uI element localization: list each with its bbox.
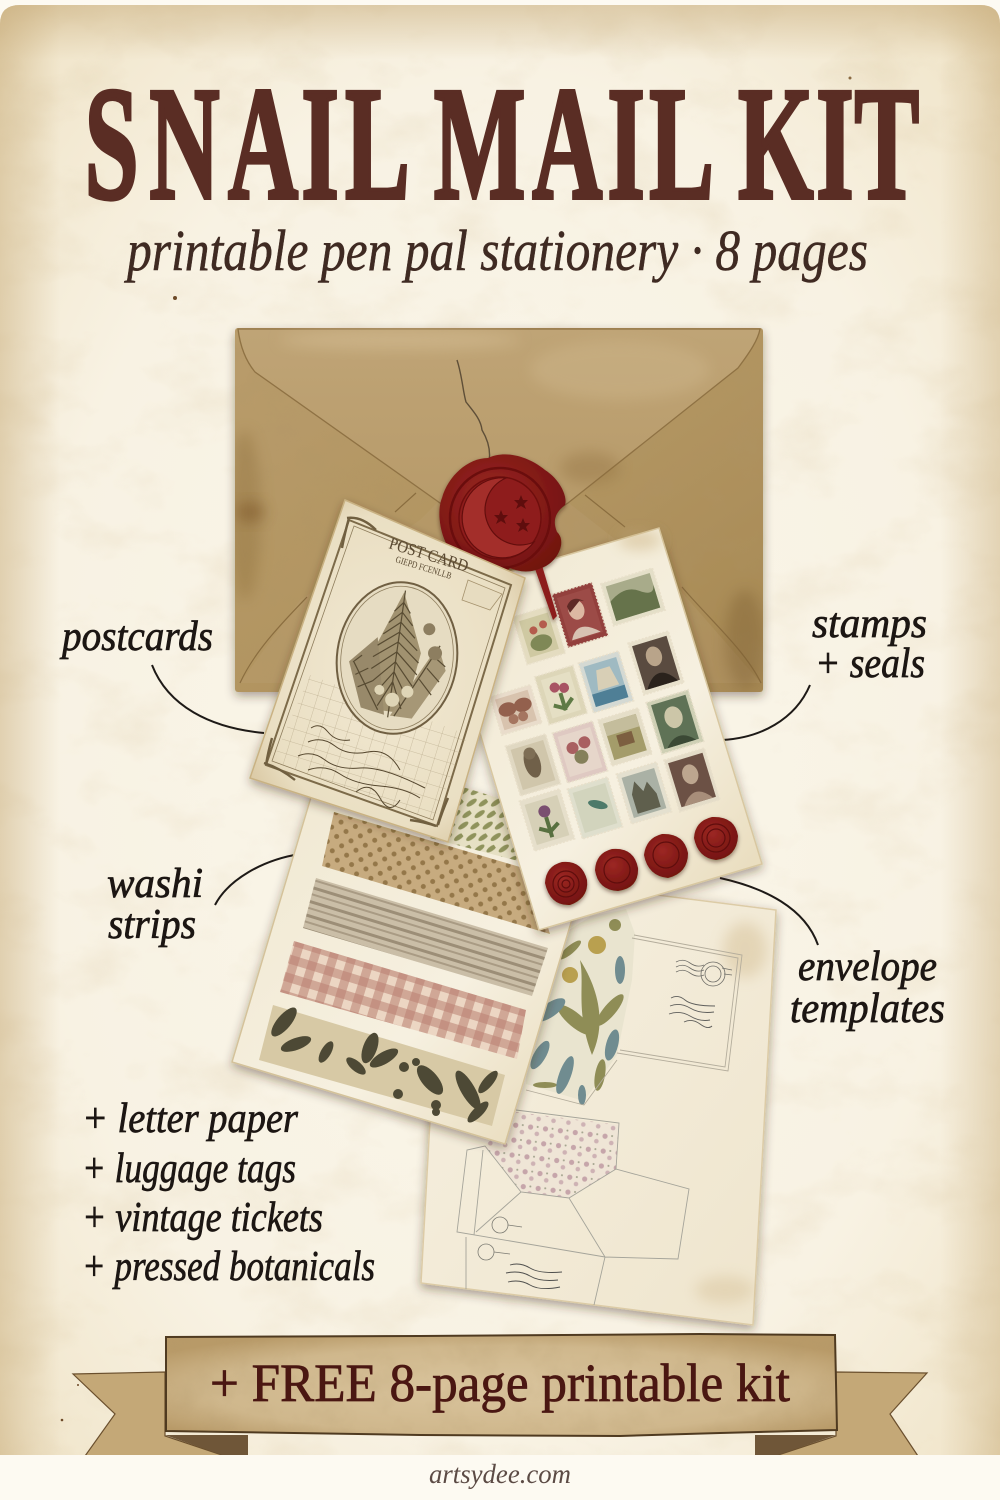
stamp: castle bbox=[616, 762, 672, 824]
stamp: queen bbox=[552, 582, 608, 648]
envelope bbox=[229, 328, 765, 692]
ticking stripe strip bbox=[303, 878, 548, 996]
callout label: washi strips: strips bbox=[108, 902, 196, 948]
postcard bbox=[250, 500, 525, 842]
corner ornaments bbox=[264, 518, 448, 826]
callout label: washi strips: washi bbox=[107, 861, 203, 907]
stamp: butterfly bbox=[490, 685, 542, 735]
stamp: flower bbox=[535, 665, 587, 725]
extras list: + pressed botanicals bbox=[82, 1244, 375, 1290]
title bbox=[85, 54, 919, 233]
sheet: washi strips bbox=[232, 780, 587, 1144]
extras list: + letter paper bbox=[82, 1096, 299, 1142]
envelope crack bbox=[457, 360, 490, 475]
postcard grid bbox=[272, 675, 468, 820]
title: KIT bbox=[738, 54, 919, 233]
postcard heading: POST CARD bbox=[387, 534, 471, 576]
wax seals row bbox=[545, 817, 738, 905]
stamp: bouquet bbox=[552, 721, 608, 783]
wax seal with crescent and stars bbox=[439, 454, 566, 620]
callout line: washi strips bbox=[215, 854, 300, 905]
stamp: portrait woman bbox=[664, 748, 720, 812]
sheet: envelope templates bbox=[421, 868, 776, 1325]
subtitle: printable pen pal stationery · 8 pages bbox=[124, 218, 868, 283]
title: MAIL bbox=[434, 54, 714, 233]
callout line: postcards bbox=[152, 665, 264, 733]
ribbon text: + FREE 8-page printable kit bbox=[210, 1353, 790, 1413]
polka dot strip bbox=[322, 812, 550, 934]
title: SNAIL bbox=[85, 54, 410, 233]
postcard handwriting bbox=[298, 726, 425, 808]
callout label: postcards: postcards bbox=[59, 614, 213, 660]
extras list bbox=[82, 1096, 375, 1290]
ribbon right tail bbox=[775, 1372, 927, 1456]
envelope lower flaps bbox=[240, 500, 761, 683]
botanical strip bbox=[259, 1004, 505, 1126]
postcard heading: GIEPD FCENLLB bbox=[394, 555, 453, 582]
stars bbox=[494, 495, 530, 532]
callout line: envelope templates bbox=[720, 878, 818, 945]
small handwriting bbox=[506, 1264, 562, 1289]
seal inner ring bbox=[450, 468, 550, 568]
callout label: stamps and seals bbox=[812, 601, 927, 687]
stamp: ship bbox=[578, 651, 634, 713]
lower envelope outline bbox=[457, 1110, 689, 1305]
callout label: stamps and seals: + seals bbox=[815, 641, 925, 687]
callout label: envelope templates: envelope bbox=[798, 944, 937, 990]
callout label: stamps and seals: stamps bbox=[812, 601, 927, 647]
upper envelope outline bbox=[526, 935, 742, 1105]
address handwriting bbox=[669, 996, 715, 1028]
stamp: thistle bbox=[519, 789, 575, 851]
extras list: + luggage tags bbox=[82, 1146, 296, 1192]
stamp: landscape bbox=[601, 568, 665, 626]
stamp: owl bbox=[505, 734, 561, 796]
extras list: + vintage tickets bbox=[82, 1195, 323, 1241]
stamp: green woman bbox=[646, 690, 704, 754]
sheet: stamps and seals bbox=[438, 528, 762, 930]
ribbon left fold bbox=[165, 1435, 248, 1456]
callout label: washi strips bbox=[107, 861, 203, 948]
postmark bbox=[676, 960, 732, 986]
small postmarks bbox=[478, 1217, 522, 1260]
gingham strip bbox=[280, 941, 526, 1059]
stamp: hummingbird bbox=[567, 777, 623, 839]
fern oval bbox=[327, 574, 467, 742]
stamp: flowers bbox=[513, 605, 565, 665]
ribbon right fold bbox=[755, 1435, 836, 1456]
postcard ornamental border bbox=[266, 520, 511, 826]
floral envelope flap bbox=[526, 909, 635, 1101]
envelope top flap bbox=[238, 329, 760, 524]
callout line: stamps and seals bbox=[722, 685, 810, 740]
crescent bbox=[462, 478, 534, 558]
pink floral envelope flap bbox=[485, 1112, 619, 1198]
postage square bbox=[462, 580, 502, 610]
green leaf strip bbox=[430, 780, 522, 862]
callout label: envelope templates: templates bbox=[790, 986, 945, 1032]
banner ribbon bbox=[73, 1334, 927, 1456]
ribbon left tail bbox=[73, 1372, 225, 1456]
footer site name: artsydee.com bbox=[429, 1459, 571, 1489]
ribbon main panel bbox=[166, 1334, 837, 1436]
stamp: bearded man bbox=[628, 631, 684, 695]
footer bar bbox=[0, 1455, 1000, 1500]
stamp: cottage bbox=[598, 708, 652, 766]
callout label: envelope templates bbox=[790, 944, 945, 1032]
